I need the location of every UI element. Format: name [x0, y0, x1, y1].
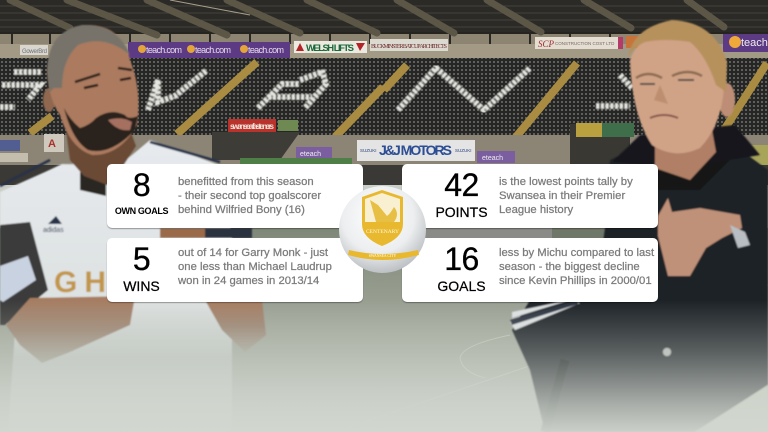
advertising boards: teach.com	[195, 45, 231, 55]
stat card: own goals: OWN GOALS	[115, 206, 168, 216]
left player: Ashley Williams	[0, 25, 266, 432]
lower stand and tunnel: J&J MOTORS	[379, 142, 452, 158]
beard	[64, 108, 138, 151]
gold stairways	[30, 62, 767, 143]
left player: Ashley Williams: adidas	[43, 227, 64, 234]
lower stand and tunnel: swansea fasteners	[230, 122, 275, 131]
stat card: goals: since Kevin Phillips in 2000/01	[499, 275, 652, 287]
hood	[612, 125, 760, 165]
advertising boards: teach.com	[248, 45, 284, 55]
stat card: wins: one less than Michael Laudrup	[178, 261, 332, 273]
centenary club badge: CENTENARY	[366, 229, 399, 235]
centenary club badge: SWANSEA CITY	[369, 254, 397, 258]
advertising boards: CONSTRUCTION COST LTD	[555, 41, 615, 46]
stat card: goals	[402, 238, 658, 302]
advertising boards: GowerBrd	[22, 49, 47, 55]
shirt	[0, 140, 232, 432]
advertising boards: SCP	[538, 39, 555, 49]
stadium roof	[0, 0, 768, 48]
lower stand and tunnel: eteach	[482, 155, 503, 162]
stat card: points: is the lowest points tally by	[499, 176, 633, 188]
lower stand and tunnel: SUZUKI	[455, 148, 472, 153]
fade over lower half	[0, 300, 768, 432]
concrete band behind advertising boards	[0, 44, 768, 60]
stat card: points	[402, 164, 658, 228]
stat card: goals: less by Michu compared to last	[499, 247, 654, 259]
stat card: goals: 16	[444, 241, 479, 277]
stat card: goals: season - the biggest decline	[499, 261, 640, 273]
stat card: points: 42	[444, 167, 479, 203]
advertising boards: teach.com	[146, 45, 182, 55]
stat card: own goals	[107, 164, 363, 228]
stat card: points: League history	[499, 204, 573, 216]
head	[47, 25, 138, 155]
sleeve and crest	[0, 222, 48, 325]
stat card: own goals: 8	[133, 167, 150, 203]
hand	[658, 198, 742, 276]
stat card: wins: WINS	[123, 278, 160, 294]
neck	[66, 130, 136, 186]
stat card: own goals: behind Wilfried Bony (16)	[178, 204, 305, 216]
advertising boards: WELSH LIFTS	[306, 43, 354, 54]
head	[630, 30, 724, 153]
brows and eyes	[75, 68, 132, 82]
lower stand and tunnel: eteach	[300, 151, 321, 158]
jacket	[512, 135, 768, 432]
advertising boards	[20, 34, 768, 58]
neck	[655, 130, 716, 180]
stat card: goals: GOALS	[437, 278, 486, 294]
cropped hair	[47, 25, 130, 92]
ear	[43, 88, 55, 112]
advertising boards: teach	[741, 37, 768, 49]
hair	[628, 20, 727, 92]
stat card: wins: won in 24 games in 2013/14	[178, 275, 319, 287]
right player: Garry Monk	[510, 20, 768, 432]
ear	[719, 83, 735, 117]
sponsor lettering: GH	[54, 266, 106, 299]
pitch	[0, 228, 768, 432]
advertising boards: BUCKMINSTER BATCUP ARCHITECTS	[371, 44, 447, 50]
stat card: own goals: benefitted from this season	[178, 176, 314, 188]
arms	[6, 296, 135, 363]
club crest on jacket	[730, 225, 750, 248]
face features	[636, 72, 702, 78]
lower stand and tunnel: A	[48, 138, 56, 150]
stat card: wins	[107, 238, 363, 302]
stat card: own goals: - their second top goalscorer	[178, 190, 321, 202]
stat card: points: POINTS	[435, 204, 488, 220]
stat card: wins: 5	[133, 241, 150, 277]
lower stand and tunnel	[0, 119, 768, 185]
centenary club badge	[339, 186, 426, 273]
seating	[0, 58, 768, 140]
stat card: points: Swansea in their Premier	[499, 190, 625, 202]
stat card: wins: out of 14 for Garry Monk - just	[178, 247, 328, 259]
lower stand and tunnel: SUZUKI	[360, 148, 377, 153]
white seats spelling SWANS	[0, 68, 632, 110]
cuff stripes	[510, 300, 580, 330]
